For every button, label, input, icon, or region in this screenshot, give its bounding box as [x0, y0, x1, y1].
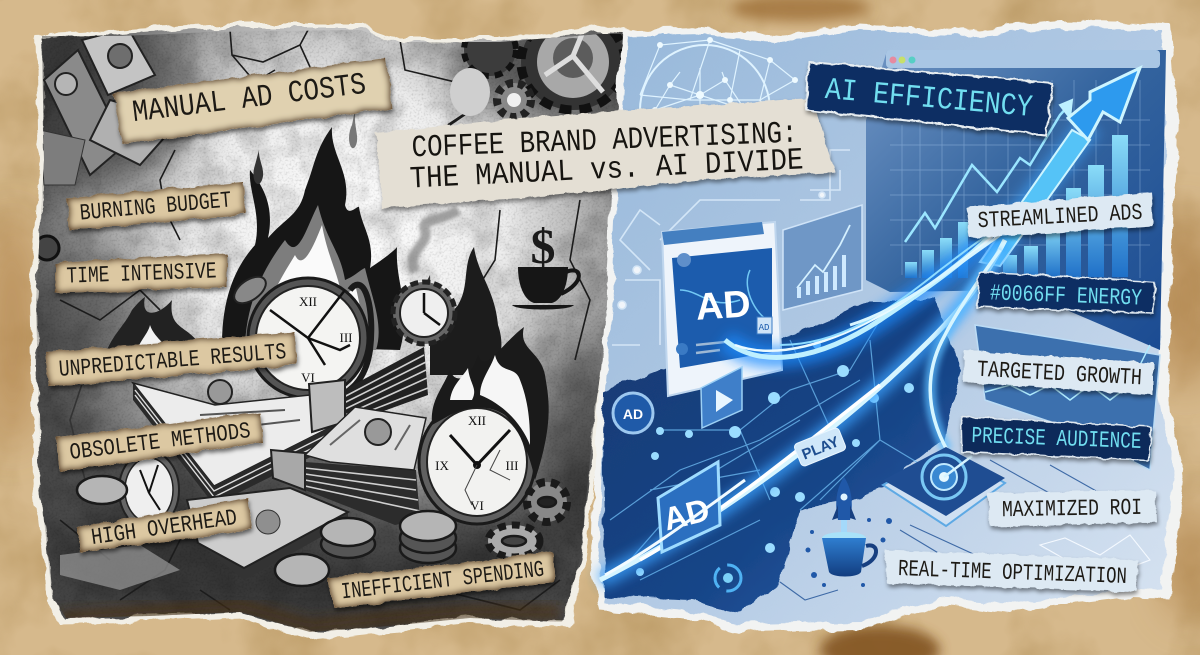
- title banner: COFFEE BRAND ADVERTISING:: [411, 117, 798, 166]
- money stack: flat bills: [60, 488, 348, 590]
- flames: right fire: [405, 210, 501, 375]
- heading: manual ad costs: MANUAL AD COSTS: [131, 68, 368, 131]
- label: maximized roi: MAXIMIZED ROI: [1002, 495, 1142, 523]
- label: maximized roi: [988, 490, 1157, 527]
- torn panel base: [590, 22, 1185, 632]
- clock: main burning clock: XII: [299, 294, 317, 309]
- label: obsolete methods: OBSOLETE METHODS: [68, 418, 252, 466]
- label: high overhead: HIGH OVERHEAD: [90, 505, 239, 551]
- clock: main burning clock: [230, 271, 371, 400]
- icon: gears top right: [35, 14, 625, 260]
- clock: burning pocket watch: III: [506, 458, 518, 473]
- label: real-time optimization: REAL-TIME OPTIMIZATION: [898, 556, 1127, 590]
- label: unpredictable results: UNPREDICTABLE RESULTS: [58, 339, 287, 383]
- ad square card: [605, 462, 745, 575]
- play tag: PLAY: [799, 433, 842, 464]
- ad browser window: AD: [759, 323, 769, 333]
- icon: ad circle badge: [613, 393, 653, 433]
- icon: coffee cup with dollar steam: [512, 218, 579, 310]
- ad browser window: AD: [694, 283, 752, 329]
- small clock on floor: [119, 456, 180, 518]
- clock: burning pocket watch: [419, 400, 535, 524]
- label: #0066FF energy: [977, 272, 1155, 313]
- label: time intensive: TIME INTENSIVE: [66, 258, 217, 290]
- clock: main burning clock: VI: [301, 370, 315, 385]
- mini chart card: [783, 205, 862, 310]
- panel: ai efficiency: [590, 22, 1185, 632]
- panel: manual ad costs: [10, 10, 650, 640]
- label: time intensive: [55, 253, 227, 293]
- icon: rocket and coffee cup: [806, 477, 892, 587]
- growth arrow: [980, 68, 1140, 266]
- label: streamlined ads: STREAMLINED ADS: [977, 200, 1143, 234]
- neural network brain: [640, 37, 798, 130]
- scorched bottom edge: [60, 606, 560, 626]
- torn panel base: [30, 24, 635, 640]
- title banner: [376, 98, 835, 208]
- coins and floor gears: [77, 476, 567, 586]
- title banner: THE MANUAL vs. AI DIVIDE: [409, 143, 804, 198]
- clock: burning pocket watch: IX: [435, 458, 449, 473]
- money stack: upper: [133, 347, 428, 505]
- label: real-time optimization: [885, 550, 1138, 592]
- energy streams: [600, 215, 1010, 580]
- icon: ad circle badge: AD: [623, 406, 643, 422]
- label: targeted growth: [963, 350, 1153, 395]
- clipped artwork: [36, 30, 623, 632]
- heading: ai efficiency: [806, 62, 1053, 135]
- icon: play button: [701, 367, 742, 428]
- sync ring icon: [715, 565, 741, 591]
- ad square card: AD: [660, 491, 713, 537]
- icon: target on platform: [883, 447, 1005, 526]
- chart panel: [866, 50, 1166, 350]
- icon: scattered banknotes: [42, 36, 164, 186]
- clock: burning pocket watch: VI: [470, 498, 484, 513]
- label: burning budget: BURNING BUDGET: [79, 187, 232, 227]
- icon: coffee cup with dollar steam: $: [530, 218, 556, 274]
- dark circuit section: [603, 300, 962, 612]
- label: targeted growth: TARGETED GROWTH: [976, 357, 1143, 391]
- label: inefficient spending: [328, 552, 554, 608]
- label: #0066FF energy: #0066FF ENERGY: [990, 280, 1143, 312]
- clock: burning pocket watch: XII: [468, 413, 486, 428]
- label: precise audience: PRECISE AUDIENCE: [971, 423, 1142, 455]
- ad browser window: [662, 222, 782, 396]
- label: streamlined ads: [966, 192, 1153, 238]
- circuit traces: [612, 150, 850, 345]
- flames: left fire: [108, 297, 195, 348]
- lower thin circuits: [780, 460, 1150, 600]
- play tag: [793, 427, 847, 467]
- clock: small gear clock: [393, 282, 455, 344]
- wall cracks: [60, 30, 590, 610]
- heading: ai efficiency: AI EFFICIENCY: [824, 73, 1034, 126]
- bar chart: [905, 135, 1128, 279]
- trend line arrow: [905, 100, 1072, 242]
- label: inefficient spending: INEFFICIENT SPENDING: [340, 557, 545, 605]
- clock: main burning clock: III: [340, 330, 352, 345]
- flames: clock fire: [432, 327, 549, 480]
- label: precise audience: [961, 417, 1151, 460]
- flames: main fire: [222, 105, 404, 350]
- money stack: lower: [271, 407, 426, 525]
- lower right chart panel: [975, 325, 1160, 470]
